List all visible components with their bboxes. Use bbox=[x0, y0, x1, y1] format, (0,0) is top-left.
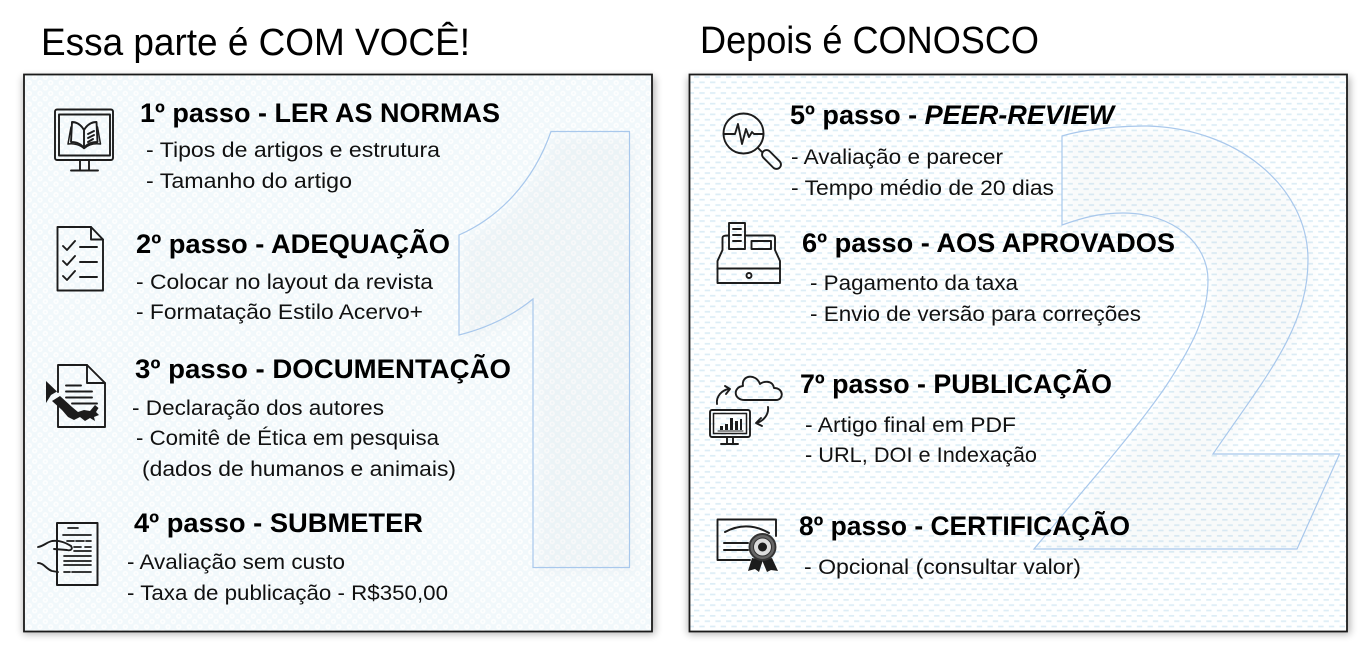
heading: 2º passo - ADEQUAÇÃO bbox=[136, 229, 450, 259]
text: item list: - Avaliação sem custo bbox=[127, 550, 345, 574]
big number 2 bbox=[1034, 126, 1346, 555]
title: right: Depois é CONOSCO bbox=[700, 20, 1039, 62]
step 2 bbox=[58, 227, 450, 324]
step 1 bbox=[55, 98, 500, 193]
heading: 1º passo - LER AS NORMAS bbox=[140, 98, 500, 128]
icon: cash register bbox=[718, 223, 780, 283]
big number 1 bbox=[459, 132, 635, 574]
text: item list: - Pagamento da taxa bbox=[810, 271, 1018, 295]
text: item list: (dados de humanos e animais) bbox=[142, 457, 456, 481]
text: item list bbox=[127, 550, 448, 605]
icon: certificate with seal bbox=[718, 520, 778, 572]
step 7 bbox=[710, 369, 1112, 467]
heading: 4º passo - SUBMETER bbox=[134, 508, 423, 538]
text: item list: - Envio de versão para correções bbox=[810, 302, 1141, 326]
title: left: Essa parte é COM VOCÊ! bbox=[41, 21, 470, 64]
icon: checklist document bbox=[58, 227, 103, 290]
text: item list: - Taxa de publicação - R$350,00 bbox=[127, 581, 448, 605]
step 8 bbox=[718, 511, 1130, 579]
text: item list bbox=[791, 145, 1054, 200]
icon: hand holding document bbox=[38, 523, 98, 585]
icon: signing document bbox=[46, 365, 105, 427]
step 4 bbox=[38, 508, 448, 605]
heading: 5º passo - PEER-REVIEW bbox=[790, 100, 1116, 130]
text: item list: - Declaração dos autores bbox=[132, 396, 384, 420]
icon: monitor and cloud bbox=[710, 377, 782, 444]
text: item list: - Colocar no layout da revista bbox=[136, 270, 433, 294]
icon: magnifier with pulse bbox=[724, 114, 783, 171]
text: item list: - Tipos de artigos e estrutura bbox=[146, 138, 440, 162]
step 6 bbox=[718, 223, 1175, 326]
text: item list bbox=[810, 271, 1141, 326]
icon: monitor with book bbox=[55, 110, 113, 170]
text: item list: - Tamanho do artigo bbox=[146, 169, 352, 193]
text: item list: - Formatação Estilo Acervo+ bbox=[136, 300, 423, 324]
text: item list bbox=[136, 270, 433, 324]
text: item list: - Comitê de Ética em pesquisa bbox=[136, 425, 439, 450]
panel: left steps bbox=[23, 74, 655, 634]
text: item list: - URL, DOI e Indexação bbox=[805, 443, 1037, 467]
step 5 bbox=[724, 100, 1116, 200]
panel: right steps bbox=[688, 74, 1350, 634]
text: item list bbox=[805, 413, 1037, 467]
heading: 3º passo - DOCUMENTAÇÃO bbox=[135, 354, 511, 384]
text: item: - Opcional (consultar valor) bbox=[804, 555, 1081, 579]
heading: 7º passo - PUBLICAÇÃO bbox=[800, 369, 1112, 399]
step 3 bbox=[46, 354, 511, 481]
text: item list bbox=[146, 138, 440, 193]
text: item list: - Avaliação e parecer bbox=[791, 145, 1003, 169]
heading: 8º passo - CERTIFICAÇÃO bbox=[799, 511, 1130, 541]
heading: 6º passo - AOS APROVADOS bbox=[802, 228, 1175, 258]
text: item list: - Tempo médio de 20 dias bbox=[791, 176, 1054, 200]
text: item list bbox=[132, 396, 456, 481]
text: item list: - Artigo final em PDF bbox=[805, 413, 1016, 437]
